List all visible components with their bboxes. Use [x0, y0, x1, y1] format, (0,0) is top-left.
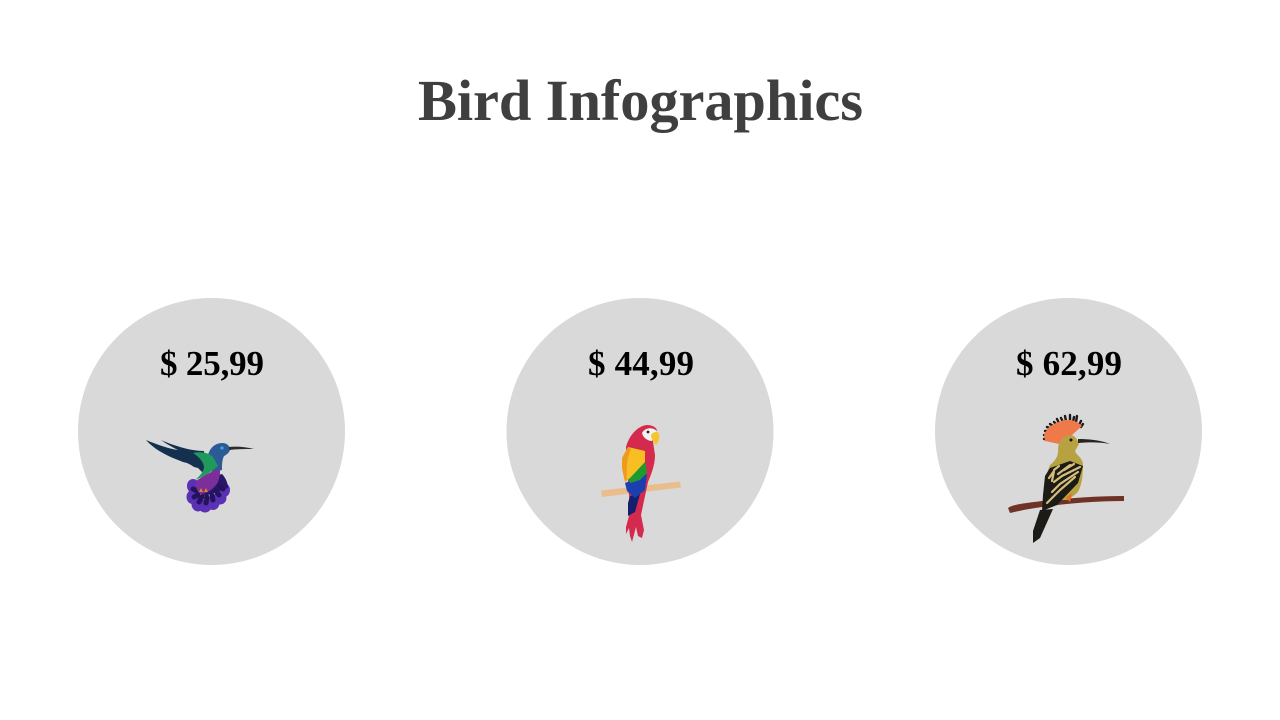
beak	[651, 432, 659, 445]
price: 44,99: $ 44,99	[588, 344, 694, 383]
eye	[647, 431, 649, 433]
beak	[1078, 439, 1110, 444]
body and head	[206, 443, 230, 472]
white face	[642, 428, 657, 441]
price: 25,99: $ 25,99	[160, 344, 264, 383]
navy feathers	[628, 494, 640, 516]
green feathers	[628, 461, 647, 483]
feet	[199, 488, 208, 492]
orange wing edge	[622, 447, 631, 482]
panel: hummingbird price	[78, 298, 345, 565]
title: Bird Infographics	[418, 68, 863, 133]
icon: macaw	[601, 425, 681, 542]
circle background	[506, 298, 774, 565]
tail	[1033, 509, 1053, 543]
eye	[1070, 438, 1072, 442]
icon: hummingbird	[146, 440, 254, 512]
panel: hoopoe price	[935, 298, 1202, 565]
back wing	[146, 440, 206, 472]
circle background	[935, 298, 1202, 565]
green wing band	[193, 452, 218, 480]
foot	[1066, 493, 1072, 502]
eye	[220, 446, 224, 450]
crest tips	[1044, 415, 1083, 439]
red body and tail	[626, 425, 657, 542]
body and head	[1045, 435, 1083, 500]
icon: hoopoe	[1008, 415, 1124, 543]
blue feathers	[625, 474, 647, 498]
circle background	[78, 298, 345, 565]
branch	[1008, 496, 1124, 513]
tail fan	[186, 474, 230, 512]
price: 62,99: $ 62,99	[1016, 344, 1122, 383]
orange crest	[1044, 420, 1082, 444]
wing stripes	[1047, 464, 1080, 503]
purple belly	[196, 469, 220, 494]
perch	[601, 482, 681, 497]
beak	[229, 447, 254, 450]
yellow wing	[622, 447, 645, 482]
striped wing	[1042, 461, 1083, 511]
panel: macaw price	[506, 298, 774, 565]
